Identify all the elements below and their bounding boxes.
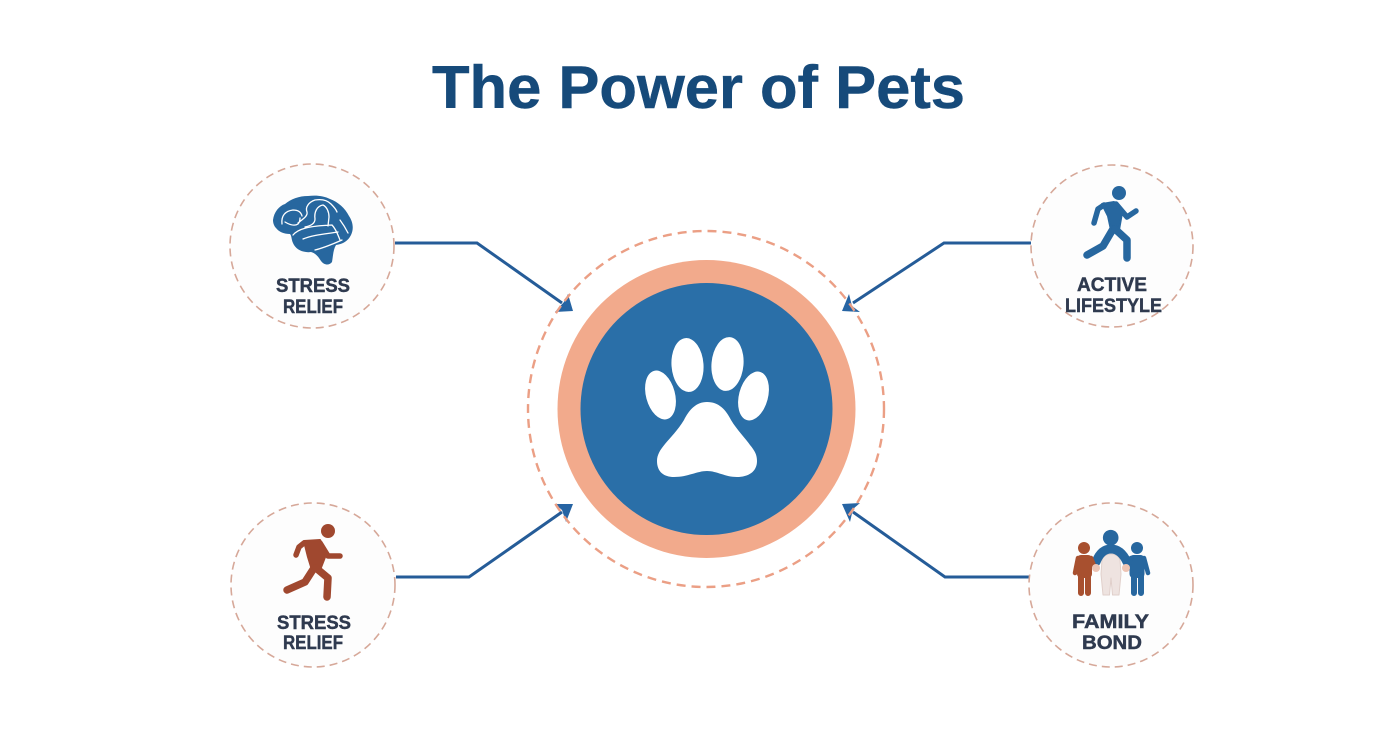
panel: family bond: [1029, 503, 1193, 667]
icon: brain: [273, 196, 353, 265]
icon: family: [1075, 530, 1148, 595]
icon: red runner: [287, 524, 340, 597]
title: The Power of Pets: [432, 54, 965, 121]
label: RELIEF: [283, 633, 343, 654]
label: ACTIVE: [1077, 275, 1147, 296]
central paw hub: [528, 231, 884, 587]
right child: [1131, 542, 1143, 554]
arrow: family bond to center: [842, 503, 1030, 577]
arrow: stress relief top-left to center: [395, 243, 573, 312]
label: STRESS: [277, 613, 351, 634]
label: BOND: [1082, 633, 1142, 654]
panel: stress relief (red runner): [231, 503, 395, 667]
icon: paw: [640, 336, 774, 477]
label: LIFESTYLE: [1065, 296, 1162, 317]
arrow: stress relief bottom-left to center: [396, 504, 573, 577]
label: STRESS: [276, 276, 350, 297]
center figure: [1101, 554, 1121, 595]
hands: [1092, 564, 1100, 572]
panel: stress relief (brain): [230, 164, 394, 328]
label: RELIEF: [283, 297, 343, 318]
parent: [1103, 530, 1118, 546]
blue disc: [580, 283, 832, 535]
arrow: active lifestyle to center: [842, 243, 1031, 312]
label: FAMILY: [1072, 612, 1149, 633]
icon: blue runner: [1087, 186, 1136, 258]
left child: [1078, 542, 1090, 554]
dashed outer ring: [528, 231, 884, 587]
panel: active lifestyle (blue runner): [1031, 165, 1193, 327]
peach ring: [558, 260, 856, 558]
